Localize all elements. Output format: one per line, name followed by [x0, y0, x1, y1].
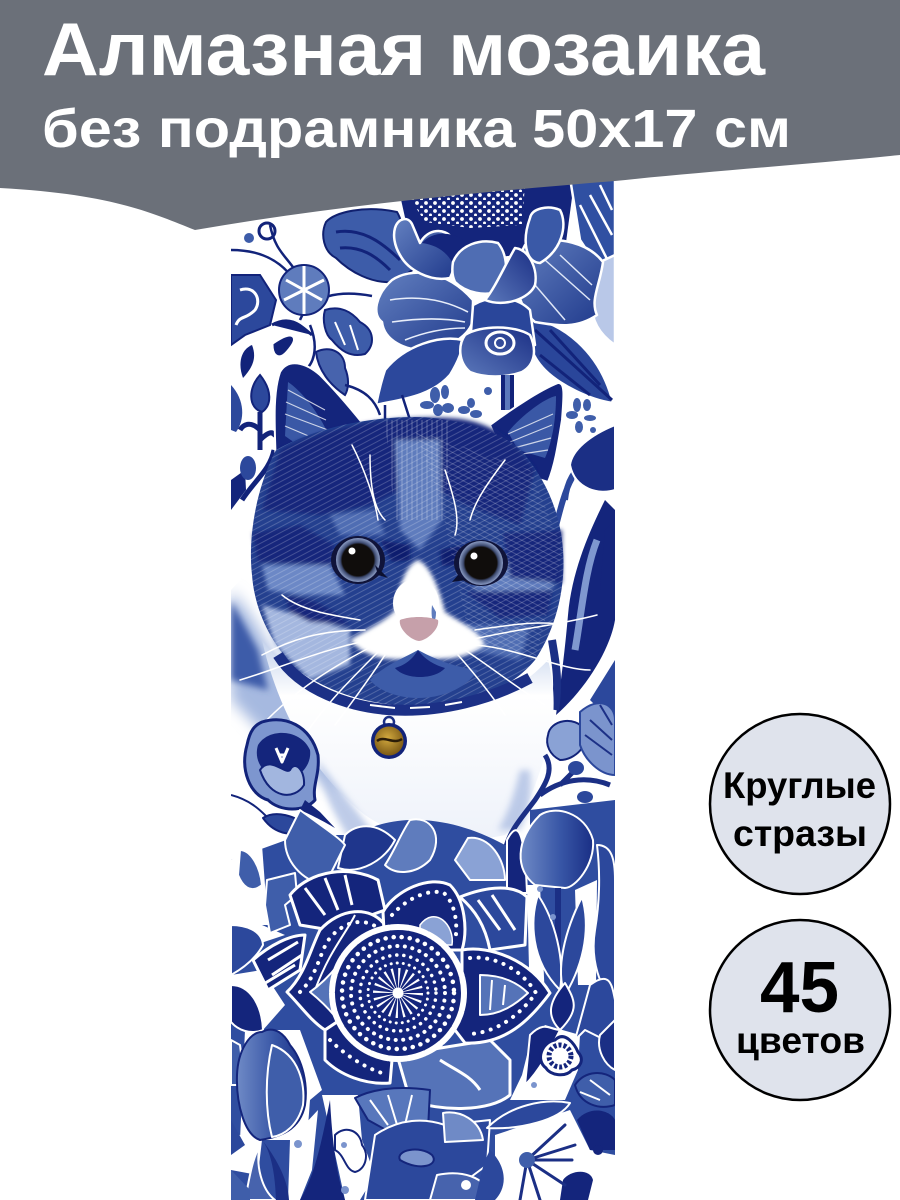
left rose flower under cat — [231, 720, 335, 834]
left lower tulip — [231, 1030, 345, 1200]
cat ears — [275, 363, 563, 482]
cat right eye — [452, 540, 508, 586]
small flowers and branches, upper left — [231, 223, 410, 510]
cat collar bell — [371, 717, 407, 759]
mandala outer foliage — [253, 872, 527, 1108]
mandala flower — [253, 872, 550, 1108]
lower small flower — [531, 1037, 581, 1088]
right side tulip bud and long leaves — [552, 425, 615, 720]
badge: 45 colours: 45 — [760, 948, 839, 1028]
mandala centre — [330, 925, 466, 1061]
mandala lobes — [287, 882, 550, 1083]
badge: round rhinestones: Круглые — [723, 765, 876, 806]
dense lower floral foliage — [231, 810, 615, 1085]
badge: 45 colours: цветов — [736, 1020, 865, 1061]
lower background: blue fill with white gaps — [231, 800, 615, 1200]
title: Алмазная мозаика — [42, 7, 766, 91]
small blue blossoms between ears — [420, 385, 596, 433]
cat white muzzle — [350, 560, 485, 698]
cat whiskers — [240, 445, 597, 735]
cat left eye — [331, 536, 388, 584]
badge: 45 colours — [710, 920, 890, 1100]
cat left shoulder fur — [231, 589, 338, 791]
right flower cluster under cat — [504, 703, 615, 845]
cat white chest — [262, 640, 554, 840]
top peony flower — [323, 175, 615, 410]
badge: round rhinestones — [710, 714, 890, 894]
cat collar — [278, 655, 530, 710]
cat nose — [400, 617, 438, 641]
cat head — [251, 417, 563, 706]
product picture: blue and white cat — [231, 170, 615, 1200]
header banner — [0, 0, 900, 230]
cat head markings — [251, 417, 563, 706]
bottom scattered flowers and leaves — [294, 886, 615, 1200]
subtitle: без подрамника 50х17 см — [42, 99, 791, 159]
badge: round rhinestones: стразы — [733, 813, 867, 854]
cat chest fur shading — [318, 760, 531, 840]
